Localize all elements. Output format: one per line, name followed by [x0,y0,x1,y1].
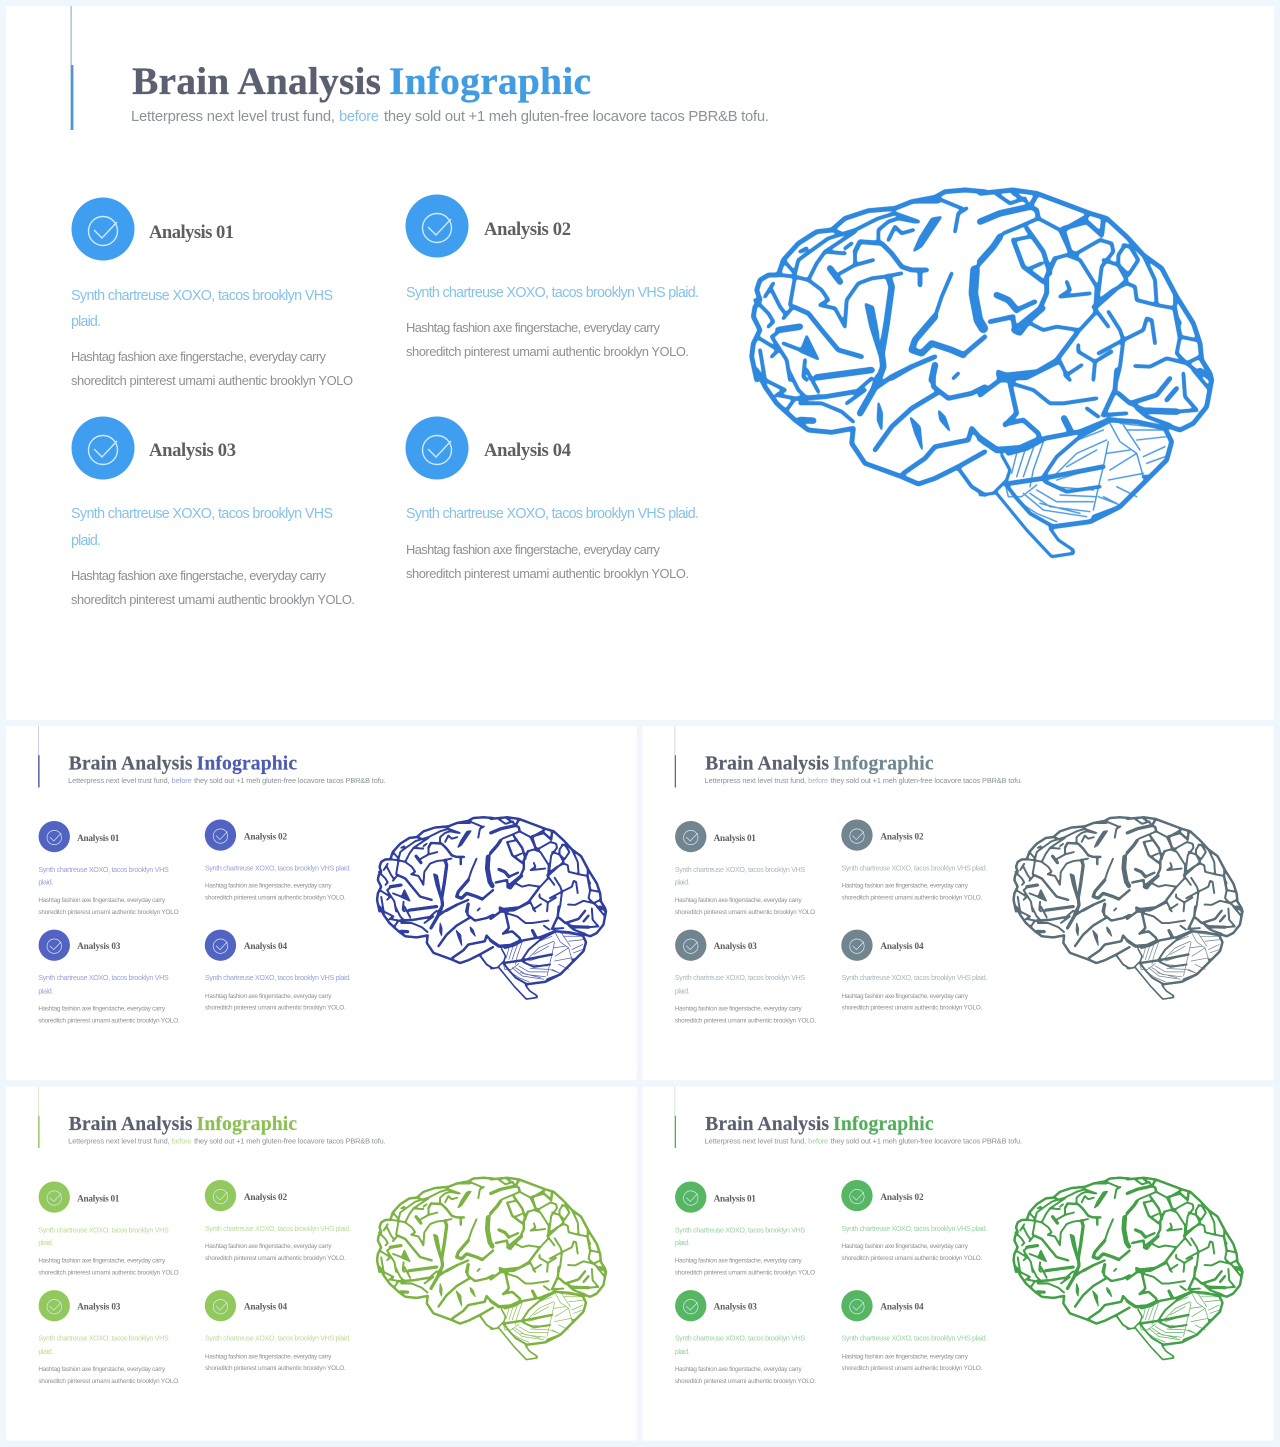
item body: Hashtag fashion axe fingerstache, everyday carry [842,883,969,890]
item tagline: plaid. [675,1239,690,1247]
item tagline: Synth chartreuse XOXO, tacos brooklyn VHS plaid. [842,864,987,872]
item body: Hashtag fashion axe fingerstache, everyday carry [675,1006,803,1013]
item body: Hashtag fashion axe fingerstache, everyday carry [842,1243,969,1250]
icon: check badge [205,819,236,851]
subtitle: before [808,1137,828,1146]
item heading: Analysis 02 [244,832,288,842]
item tagline: Synth chartreuse XOXO, tacos brooklyn VHS plaid. [406,285,699,301]
icon: check badge [205,930,236,961]
icon: check badge [841,819,873,851]
subtitle: before [172,1137,192,1146]
item tagline: plaid. [675,879,690,887]
item: Analysis 04 [841,930,987,1012]
item body: shoreditch pinterest umami authentic brooklyn YOLO [38,909,179,916]
subtitle: Letterpress next level trust fund, [705,776,806,785]
header accent line [675,1086,676,1148]
item: Analysis 02 [205,1180,351,1262]
panel: green slide [642,1086,1273,1441]
panel: indigo slide [6,726,637,1080]
item body: Hashtag fashion axe fingerstache, everyday carry [71,349,327,364]
item: Analysis 04 [205,930,351,1012]
heading: Brain Analysis [132,59,381,103]
item heading: Analysis 04 [244,1302,288,1312]
subtitle: before [808,776,828,785]
item body: shoreditch pinterest umami authentic brooklyn YOLO. [406,344,689,359]
item body: shoreditch pinterest umami authentic brooklyn YOLO. [205,1005,346,1012]
item body: shoreditch pinterest umami authentic brooklyn YOLO [675,1269,815,1276]
item body: shoreditch pinterest umami authentic brooklyn YOLO [675,909,815,916]
item heading: Analysis 03 [77,941,121,951]
heading: Brain Analysis [69,1114,193,1135]
heading: Brain Analysis [705,1114,829,1135]
icon: check badge [675,930,706,961]
icon: check badge [675,1290,706,1321]
icon: check badge [72,198,134,260]
brain illustration [377,1178,606,1360]
heading: Infographic [833,1114,934,1135]
item tagline: Synth chartreuse XOXO, tacos brooklyn VHS plaid. [406,506,699,522]
item heading: Analysis 02 [484,219,571,240]
item body: Hashtag fashion axe fingerstache, everyday carry [406,542,661,557]
item tagline: Synth chartreuse XOXO, tacos brooklyn VHS plaid. [842,974,987,982]
item tagline: Synth chartreuse XOXO, tacos brooklyn VHS [38,1226,169,1234]
item: Analysis 03 [38,930,180,1025]
item body: Hashtag fashion axe fingerstache, everyday carry [38,1258,166,1265]
item: Analysis 01 [675,1181,815,1276]
brain illustration [752,190,1212,557]
item heading: Analysis 04 [880,1302,924,1312]
item body: Hashtag fashion axe fingerstache, everyday carry [675,1366,803,1373]
item body: Hashtag fashion axe fingerstache, everyday carry [38,897,166,904]
header accent line [675,726,676,787]
heading: Infographic [833,754,934,775]
header accent line [38,1086,40,1148]
item tagline: Synth chartreuse XOXO, tacos brooklyn VHS plaid. [205,974,351,982]
item body: Hashtag fashion axe fingerstache, everyday carry [406,320,661,335]
item heading: Analysis 04 [484,440,571,461]
item heading: Analysis 04 [880,941,924,951]
item body: shoreditch pinterest umami authentic brooklyn YOLO. [842,1365,983,1372]
subtitle: they sold out +1 meh gluten-free locavore tacos PBR&B tofu. [194,1137,386,1146]
item tagline: Synth chartreuse XOXO, tacos brooklyn VHS [71,506,333,522]
panel: lime slide [6,1086,637,1441]
item tagline: Synth chartreuse XOXO, tacos brooklyn VHS [675,1334,805,1342]
brain illustration [377,817,606,999]
item body: Hashtag fashion axe fingerstache, everyday carry [38,1366,166,1373]
item body: shoreditch pinterest umami authentic brooklyn YOLO. [842,1255,983,1262]
item tagline: plaid. [38,987,53,995]
header accent line [38,726,40,787]
icon: check badge [39,930,70,961]
icon: check badge [39,1181,70,1213]
icon: check badge [675,821,706,852]
icon: check badge [39,821,70,852]
item tagline: Synth chartreuse XOXO, tacos brooklyn VHS plaid. [205,864,351,872]
subtitle: they sold out +1 meh gluten-free locavore tacos PBR&B tofu. [194,776,386,785]
icon: check badge [841,1290,873,1321]
item heading: Analysis 01 [149,222,234,243]
item tagline: Synth chartreuse XOXO, tacos brooklyn VHS [675,866,805,874]
item body: Hashtag fashion axe fingerstache, everyday carry [675,1258,803,1265]
item tagline: plaid. [71,314,101,330]
item heading: Analysis 03 [714,1302,757,1312]
item: Analysis 04 [841,1290,987,1372]
item tagline: Synth chartreuse XOXO, tacos brooklyn VHS [38,974,169,982]
icon: check badge [406,416,468,480]
item body: shoreditch pinterest umami authentic brooklyn YOLO. [842,1005,983,1012]
item: Analysis 02 [841,819,987,902]
heading: Infographic [197,754,297,775]
item tagline: Synth chartreuse XOXO, tacos brooklyn VHS [675,1226,805,1234]
item body: Hashtag fashion axe fingerstache, everyday carry [842,993,969,1000]
item heading: Analysis 01 [77,1194,120,1204]
item: Analysis 03 [71,416,355,607]
item: Analysis 02 [406,194,699,359]
item body: shoreditch pinterest umami authentic brooklyn YOLO [38,1269,179,1276]
item body: shoreditch pinterest umami authentic brooklyn YOLO. [71,592,355,607]
item: Analysis 02 [205,819,351,902]
item: Analysis 03 [675,1290,816,1385]
item: Analysis 01 [38,821,179,916]
brain illustration [1014,1178,1242,1360]
item: Analysis 01 [675,821,815,916]
item tagline: plaid. [675,987,690,995]
item: Analysis 04 [406,416,699,581]
item tagline: Synth chartreuse XOXO, tacos brooklyn VHS [675,974,805,982]
subtitle: Letterpress next level trust fund, [131,109,335,125]
icon: check badge [205,1180,236,1211]
item heading: Analysis 02 [244,1192,288,1202]
item body: shoreditch pinterest umami authentic brooklyn YOLO. [675,1378,816,1385]
subtitle: Letterpress next level trust fund, [705,1137,806,1146]
item body: Hashtag fashion axe fingerstache, everyday carry [675,897,803,904]
item body: shoreditch pinterest umami authentic brooklyn YOLO [71,373,353,388]
item tagline: plaid. [38,879,53,887]
item tagline: plaid. [675,1348,690,1356]
icon: check badge [841,930,873,961]
item: Analysis 02 [841,1180,987,1262]
icon: check badge [675,1181,706,1213]
item tagline: plaid. [38,1239,53,1247]
item heading: Analysis 01 [714,833,756,843]
item tagline: Synth chartreuse XOXO, tacos brooklyn VHS plaid. [842,1334,987,1342]
item body: shoreditch pinterest umami authentic brooklyn YOLO. [205,1365,346,1372]
subtitle: Letterpress next level trust fund, [68,776,170,785]
heading: Brain Analysis [705,754,829,775]
heading: Infographic [389,59,591,103]
item body: Hashtag fashion axe fingerstache, everyday carry [205,993,332,1000]
item tagline: Synth chartreuse XOXO, tacos brooklyn VHS [71,288,333,304]
item body: shoreditch pinterest umami authentic brooklyn YOLO. [205,895,346,902]
item body: shoreditch pinterest umami authentic brooklyn YOLO. [842,895,983,902]
item tagline: Synth chartreuse XOXO, tacos brooklyn VHS [38,866,169,874]
subtitle: they sold out +1 meh gluten-free locavore tacos PBR&B tofu. [831,1137,1022,1146]
item heading: Analysis 04 [244,941,288,951]
item body: Hashtag fashion axe fingerstache, everyday carry [38,1006,166,1013]
item body: Hashtag fashion axe fingerstache, everyday carry [71,568,327,583]
subtitle: they sold out +1 meh gluten-free locavore tacos PBR&B tofu. [831,776,1022,785]
item: Analysis 04 [205,1290,351,1372]
item body: shoreditch pinterest umami authentic brooklyn YOLO. [675,1018,816,1025]
item body: Hashtag fashion axe fingerstache, everyday carry [205,1353,332,1360]
item tagline: plaid. [38,1348,53,1356]
item body: Hashtag fashion axe fingerstache, everyday carry [205,883,332,890]
item: Analysis 01 [71,198,353,388]
item body: shoreditch pinterest umami authentic brooklyn YOLO. [406,566,689,581]
icon: check badge [841,1180,873,1211]
item heading: Analysis 01 [714,1194,756,1204]
subtitle: they sold out +1 meh gluten-free locavore tacos PBR&B tofu. [384,109,769,125]
icon: check badge [72,416,134,480]
item tagline: Synth chartreuse XOXO, tacos brooklyn VHS plaid. [842,1225,987,1233]
item: Analysis 01 [38,1181,179,1276]
heading: Brain Analysis [69,754,193,775]
subtitle: before [172,776,192,785]
item tagline: Synth chartreuse XOXO, tacos brooklyn VHS plaid. [205,1334,351,1342]
item tagline: Synth chartreuse XOXO, tacos brooklyn VHS [38,1334,169,1342]
item heading: Analysis 03 [149,440,236,461]
subtitle: Letterpress next level trust fund, [68,1137,170,1146]
item tagline: Synth chartreuse XOXO, tacos brooklyn VHS plaid. [205,1225,351,1233]
item: Analysis 03 [675,930,816,1025]
item body: Hashtag fashion axe fingerstache, everyday carry [205,1243,332,1250]
item body: Hashtag fashion axe fingerstache, everyday carry [842,1353,969,1360]
icon: check badge [205,1290,236,1321]
icon: check badge [39,1290,70,1321]
panel: blue main slide [6,6,1274,720]
item: Analysis 03 [38,1290,180,1385]
item tagline: plaid. [71,533,101,549]
panel: slate slide [642,726,1273,1080]
item heading: Analysis 03 [714,941,757,951]
item body: shoreditch pinterest umami authentic brooklyn YOLO. [38,1018,180,1025]
item body: shoreditch pinterest umami authentic brooklyn YOLO. [205,1255,346,1262]
header accent line [70,6,73,130]
item heading: Analysis 03 [77,1302,121,1312]
subtitle: before [339,109,379,125]
item body: shoreditch pinterest umami authentic brooklyn YOLO. [38,1378,180,1385]
item heading: Analysis 01 [77,833,120,843]
item heading: Analysis 02 [880,832,924,842]
item heading: Analysis 02 [880,1192,924,1202]
icon: check badge [406,194,468,258]
heading: Infographic [197,1114,297,1135]
brain illustration [1014,817,1242,999]
